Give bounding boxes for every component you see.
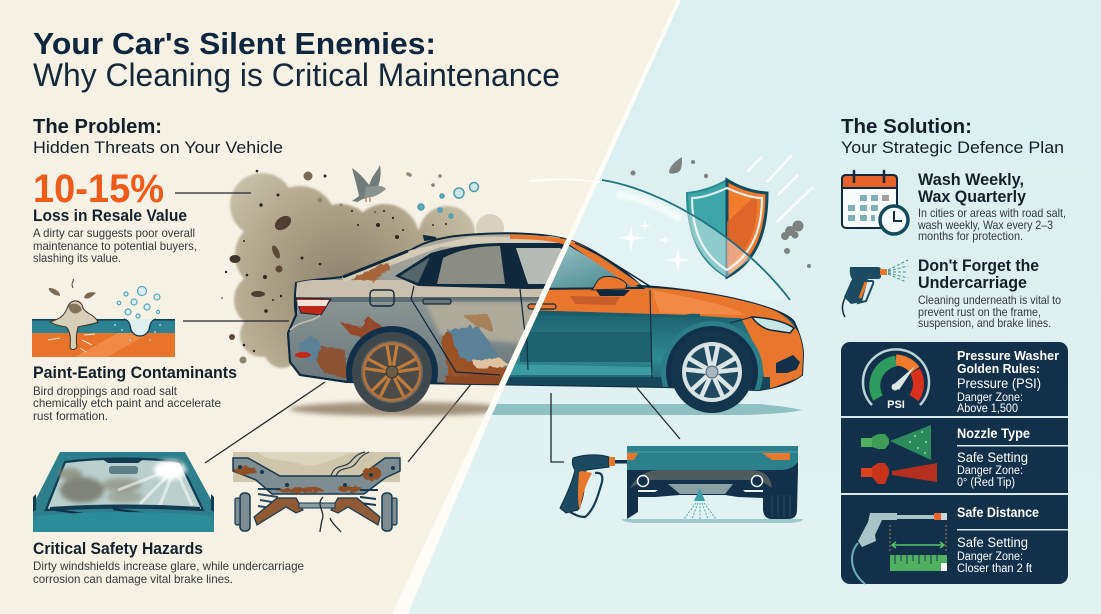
icon: sparkles [618, 220, 690, 272]
text: pressure rules: Danger Zone: [957, 392, 1023, 404]
icon: nozzle spray comparison [861, 425, 937, 484]
stat block: resale value [33, 167, 197, 265]
connector: paint to car [183, 320, 289, 322]
stat block: resale value: A dirty car suggests poor overall [33, 226, 195, 240]
icon: bird [352, 165, 386, 202]
text: pressure rules [957, 348, 1059, 415]
text block: wash weekly: months for protection. [918, 229, 1023, 243]
text: pressure rules: Golden Rules: [957, 361, 1040, 376]
title: Why Cleaning is Critical Maintenance [33, 57, 560, 93]
icon: calendar with clock [842, 171, 908, 234]
text: nozzle rules: Nozzle Type [957, 426, 1030, 441]
stat block: resale value: Loss in Resale Value [33, 206, 187, 225]
title [33, 26, 560, 93]
text: nozzle rules [957, 426, 1068, 489]
text: pressure rules: Pressure (PSI) [957, 376, 1041, 391]
icon: paint damage cross-section [32, 279, 175, 357]
solution heading: The Solution: [841, 116, 972, 138]
text: nozzle rules: Safe Setting [957, 450, 1028, 465]
stat block: resale value: maintenance to potential buyers, [33, 239, 197, 253]
text block: undercarriage [918, 256, 1061, 330]
text: distance rules [957, 505, 1068, 575]
divider: white diagonal [392, 0, 681, 614]
text block: undercarriage: Undercarriage [918, 273, 1027, 292]
text block: paint-eating contaminants [33, 363, 237, 423]
text: distance rules: Safe Distance [957, 505, 1039, 520]
rear wheel: rusty [352, 332, 432, 412]
icon: car rear underside spray [622, 446, 803, 523]
problem heading: The Problem: [33, 116, 162, 138]
text block: paint-eating contaminants: Bird droppings and road salt [33, 384, 178, 398]
text block: paint-eating contaminants: chemically etch paint and accelerate [33, 396, 221, 410]
text block: undercarriage: suspension, and brake lines. [918, 316, 1051, 330]
connector: car to underside [637, 388, 680, 439]
connector: resale value to smoke [175, 192, 251, 194]
problem heading: Hidden Threats on Your Vehicle [33, 138, 283, 157]
text block: paint-eating contaminants: Paint-Eating Contaminants [33, 363, 237, 382]
car: clean half [505, 240, 804, 413]
text block: wash weekly: wash weekly, Wax every 2–3 [917, 218, 1053, 232]
icon: rusted undercarriage [233, 452, 400, 532]
text block: critical safety hazards: Dirty windshields increase glare, while undercarriage [33, 559, 304, 573]
text block: critical safety hazards: corrosion can damage vital brake lines. [33, 572, 233, 586]
text block: undercarriage: prevent rust on the frame, [918, 305, 1041, 319]
text: nozzle rules: Danger Zone: [957, 465, 1023, 477]
icon: PSI gauge: PSI [887, 399, 905, 411]
connector: car to pressure gun [551, 393, 564, 462]
background: solution side [400, 0, 1101, 614]
icon: safe distance gun and ruler [852, 513, 947, 584]
text block: wash weekly [917, 170, 1066, 243]
illustration: dust and grime cloud [221, 170, 504, 368]
problem heading [33, 116, 283, 157]
text: distance rules: Danger Zone: [957, 551, 1023, 563]
divider accent: glass dome and white streaks [530, 154, 814, 223]
text: distance rules: Closer than 2 ft [957, 563, 1033, 575]
text: pressure rules: Pressure Washer [957, 348, 1059, 363]
icon: spray gun [842, 260, 908, 317]
dome arc line [602, 180, 790, 300]
stat block: resale value: 10-15% [33, 167, 164, 211]
solution heading [841, 116, 1064, 157]
text: pressure rules: Above 1,500 [957, 403, 1018, 415]
connector: car to undercarriage [408, 378, 476, 462]
icon: pressure washer gun [560, 455, 627, 517]
panel: pressure washer golden rules [841, 342, 1068, 584]
text: distance rules: Safe Setting [957, 535, 1028, 550]
text block: undercarriage: Don't Forget the [918, 256, 1039, 275]
text: nozzle rules: 0° (Red Tip) [957, 477, 1015, 489]
ground shadow: dirty side dust [290, 402, 510, 416]
stat block: resale value: slashing its value. [33, 251, 121, 265]
icon: dirty windshield [33, 452, 214, 532]
title: Your Car's Silent Enemies: [33, 26, 436, 61]
icon: PSI gauge [863, 349, 929, 411]
text block: critical safety hazards: Critical Safety Hazards [33, 539, 203, 558]
text block: paint-eating contaminants: rust formation. [33, 409, 108, 423]
text block: undercarriage: Cleaning underneath is vital to [918, 293, 1061, 307]
solution heading: Your Strategic Defence Plan [841, 139, 1064, 157]
background: problem side [0, 0, 700, 614]
icon: shield [686, 180, 767, 277]
icon: floating droplets [407, 173, 478, 218]
front wheel: clean [674, 342, 749, 413]
text block: wash weekly: In cities or areas with road salt, [918, 206, 1066, 220]
text block: critical safety hazards [33, 539, 304, 586]
ground shadow: clean side [486, 404, 802, 415]
connector: car to windshield [205, 382, 325, 463]
text block: wash weekly: Wash Weekly, [918, 170, 1024, 189]
text block: wash weekly: Wax Quarterly [918, 187, 1027, 206]
icon: deflected grime particles [630, 157, 811, 268]
car: rusty half [287, 232, 567, 412]
illustration: half rusty, half clean car [288, 233, 803, 423]
